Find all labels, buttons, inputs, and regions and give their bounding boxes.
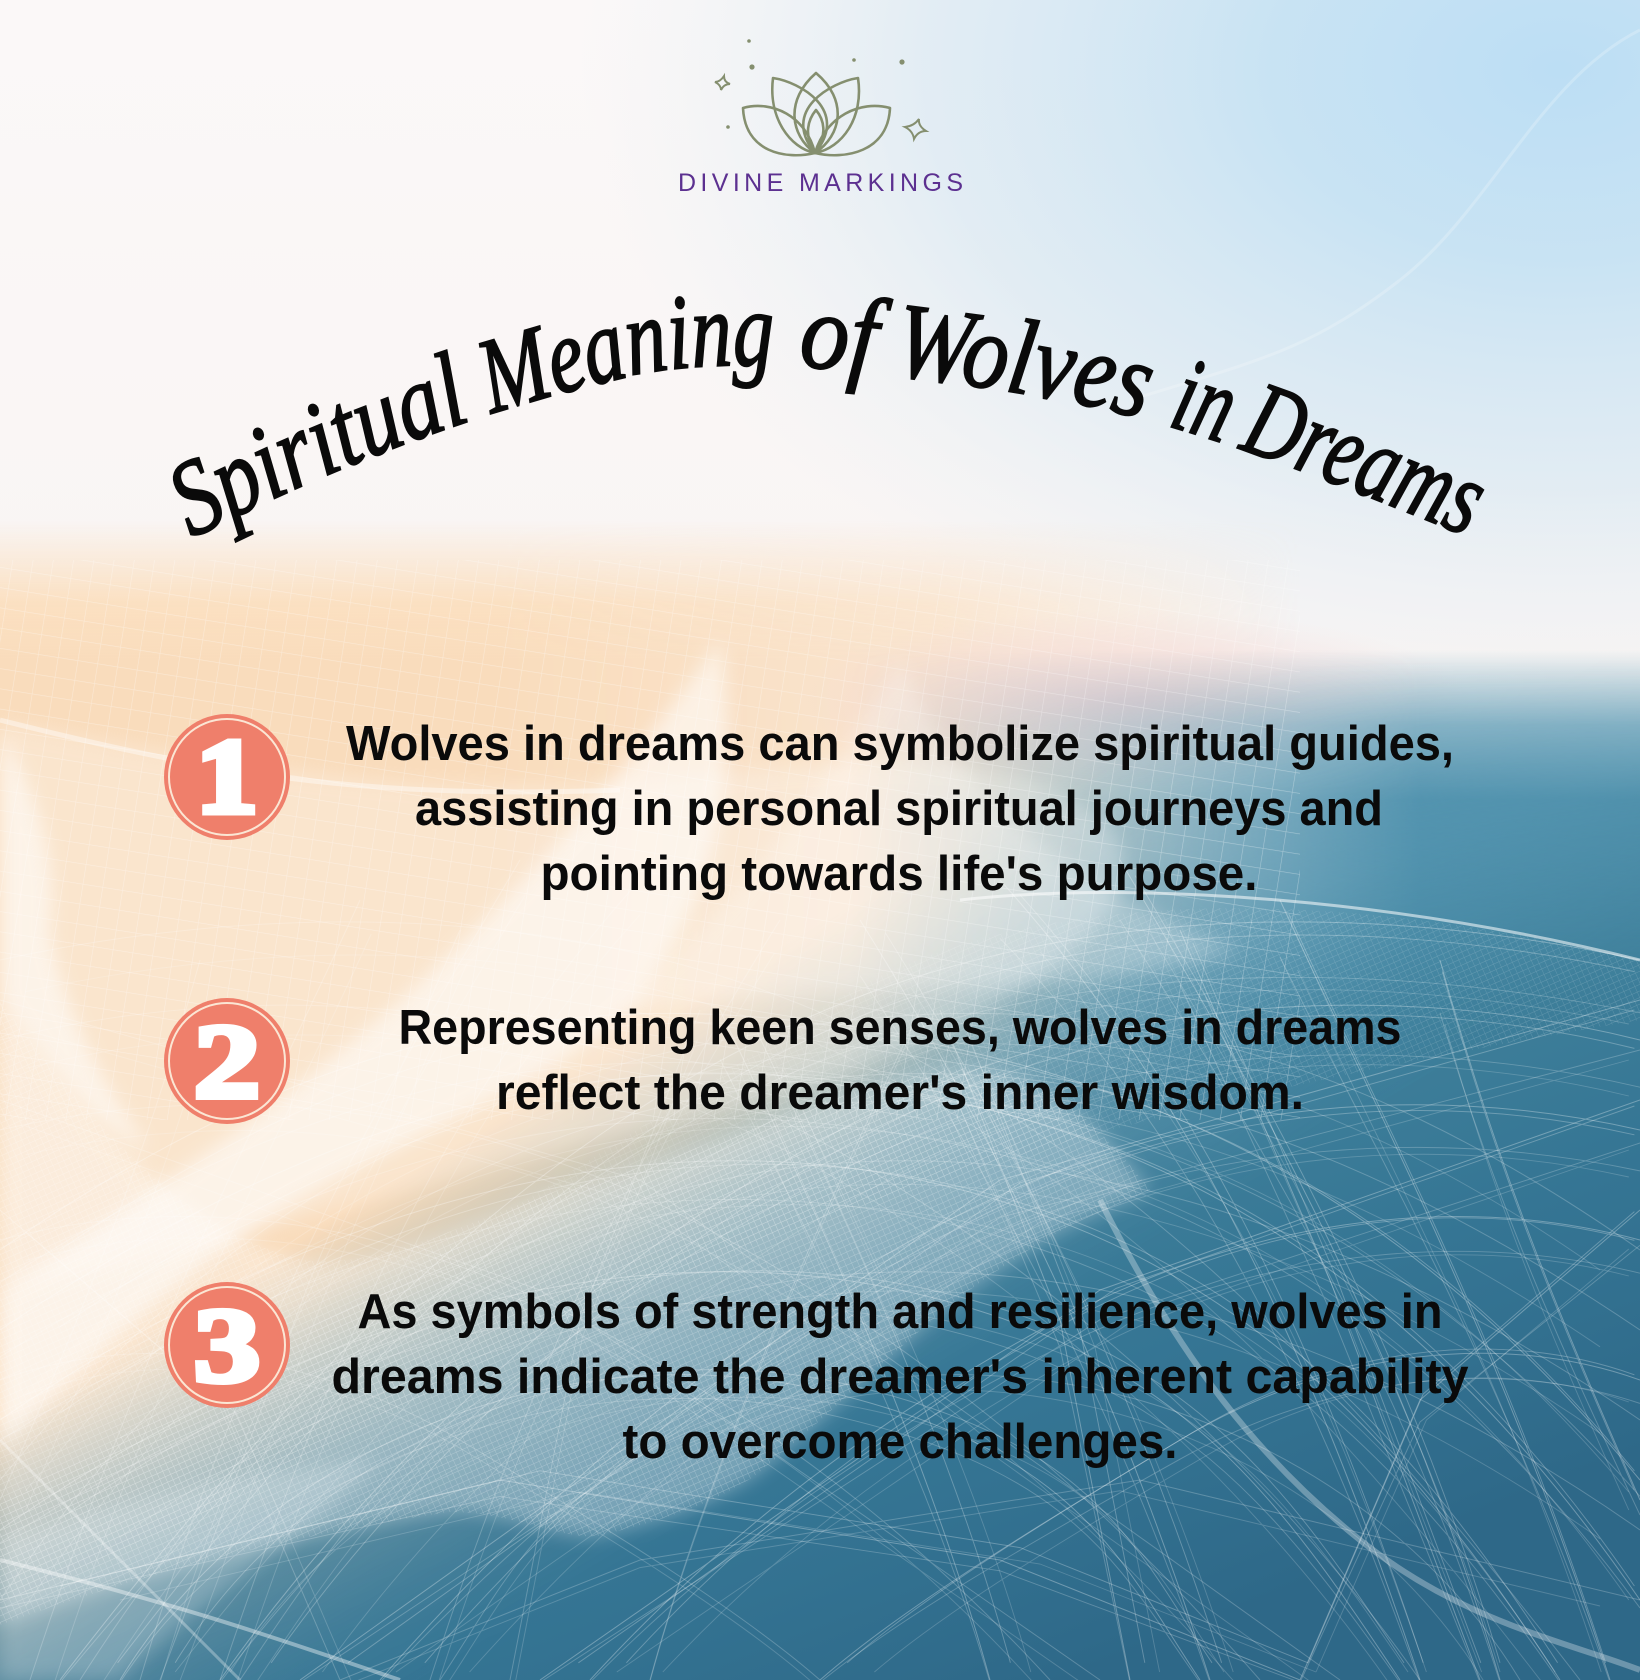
item 2 bbox=[164, 998, 1402, 1124]
text 2: Representing keen senses, wolves in dreams bbox=[398, 1001, 1402, 1055]
text 3 bbox=[332, 1285, 1468, 1469]
badge 1 bbox=[164, 714, 290, 840]
icon: lotus bbox=[743, 73, 890, 155]
badge 1: 1 bbox=[197, 717, 257, 835]
logo wordmark: DIVINE MARKINGS bbox=[678, 169, 963, 197]
title: curved script heading: Spiritual Meaning of Wolves in Dreams bbox=[172, 296, 1484, 544]
item 3 bbox=[164, 1282, 1468, 1469]
item 1 bbox=[164, 714, 1454, 901]
text 1: assisting in personal spiritual journeys and bbox=[415, 782, 1383, 836]
text 1 bbox=[346, 717, 1454, 901]
text 2 bbox=[398, 1001, 1402, 1120]
icon: sparkles bbox=[715, 39, 926, 139]
text 2: reflect the dreamer's inner wisdom. bbox=[496, 1066, 1304, 1120]
text 1: pointing towards life's purpose. bbox=[540, 847, 1258, 901]
logo: Divine Markings bbox=[678, 39, 963, 197]
text 3: dreams indicate the dreamer's inherent capability bbox=[332, 1350, 1468, 1404]
text 3: to overcome challenges. bbox=[622, 1415, 1178, 1469]
badge 2 bbox=[164, 998, 290, 1124]
badge 3 bbox=[164, 1282, 290, 1408]
text 1: Wolves in dreams can symbolize spiritual guides, bbox=[346, 717, 1454, 771]
badge 2: 2 bbox=[194, 1002, 260, 1120]
badge 3: 3 bbox=[194, 1286, 260, 1404]
text 3: As symbols of strength and resilience, wolves in bbox=[358, 1285, 1442, 1339]
